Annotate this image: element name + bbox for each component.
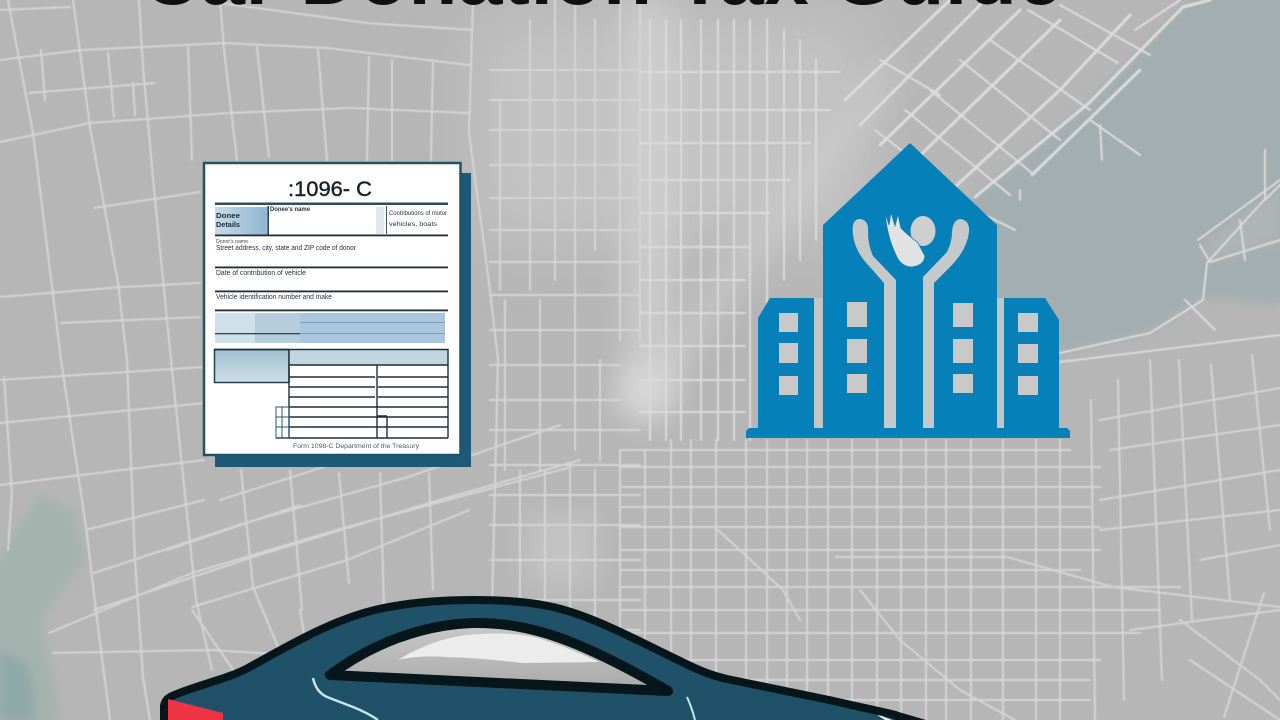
water: bay at lower left (0, 493, 86, 720)
donated car (164, 600, 926, 720)
car body outline (164, 600, 896, 720)
car body fill (164, 600, 908, 720)
gaps between building parts (814, 298, 1004, 428)
document shadow panel (215, 173, 471, 467)
top form row: Contributions of motor (389, 211, 447, 217)
hood outline tip (894, 711, 926, 720)
top form row: vehicles, boats (389, 222, 437, 228)
document sheet (204, 163, 460, 455)
windows (779, 302, 1038, 395)
form field rows (215, 234, 448, 311)
water: lake core (960, 0, 1280, 355)
form field rows: Date of contribution of vehicle (216, 270, 306, 277)
water: deep bay (0, 650, 36, 720)
top form row: Donee (216, 213, 240, 220)
left wing (758, 298, 814, 430)
form field rows: Vehicle identification number and make (216, 294, 332, 301)
value table (214, 350, 448, 438)
form field rows: Donor's name (216, 239, 248, 245)
charity building icon (746, 143, 1070, 438)
form field rows: Street address, city, state and ZIP code of donor (216, 245, 357, 252)
form footer text: Form 1098-C Department of the Treasury (293, 444, 419, 450)
top form row: Donee's name (270, 207, 311, 213)
land: peninsula at right (1205, 190, 1280, 263)
center tower (823, 143, 997, 430)
window highlight (398, 634, 599, 663)
blue shaded band (215, 313, 445, 343)
base slab (746, 428, 1070, 438)
right wing (1004, 298, 1059, 430)
form number heading: :1096- C (288, 178, 372, 201)
window (330, 623, 668, 691)
hood highlight (877, 715, 892, 720)
body highlight right (687, 697, 695, 720)
tail light (168, 699, 223, 720)
body highlight left (313, 678, 378, 720)
water: lake at right (950, 0, 1280, 365)
raised arms figure (853, 212, 969, 428)
water: bay core (0, 503, 76, 720)
form 1098-C document (204, 163, 471, 467)
top form row: Details (216, 222, 240, 229)
top form row (215, 202, 448, 235)
